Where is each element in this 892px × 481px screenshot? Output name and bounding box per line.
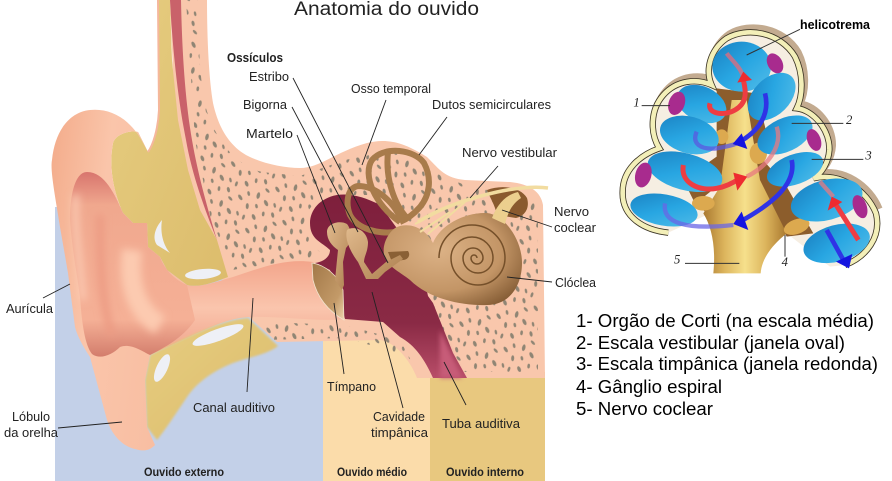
concha soft highlights bbox=[76, 195, 160, 335]
incus and stapes bbox=[346, 228, 403, 279]
cochlea bbox=[384, 213, 522, 305]
cochlear nerve bbox=[492, 192, 521, 224]
label: Aurícula: Aurícula bbox=[6, 301, 54, 316]
ear canal bbox=[150, 261, 345, 355]
temporal bone bbox=[170, 0, 545, 378]
lower bone speckles bbox=[262, 322, 415, 368]
labels: anatomy bbox=[4, 50, 597, 479]
lower cartilage bbox=[145, 318, 278, 440]
auricle bbox=[52, 110, 195, 450]
label: Estribo: Estribo bbox=[249, 69, 289, 84]
label: Ouvido externo: Ouvido externo bbox=[144, 465, 224, 479]
number callouts bbox=[642, 29, 863, 263]
label: Lóbulo da orelha bbox=[4, 409, 59, 440]
red arrowheads bbox=[733, 72, 842, 211]
label: Nervo coclear: Nervo bbox=[554, 204, 589, 219]
number 2: 2 bbox=[846, 113, 853, 127]
panel: ouvido externo background bbox=[55, 207, 323, 481]
label: Nervo vestibular: Nervo vestibular bbox=[462, 145, 558, 160]
nerve pocket bbox=[487, 187, 528, 218]
stapes footplate bbox=[388, 251, 409, 262]
legend item 1: 1- Orgão de Corti (na escala média) bbox=[576, 311, 874, 331]
pale flow tails bbox=[665, 53, 833, 227]
label: Bigorna: Bigorna bbox=[243, 97, 288, 112]
central bone bbox=[683, 88, 813, 237]
semicircular ducts bbox=[348, 151, 429, 232]
legend item 2: 2- Escala vestibular (janela oval) bbox=[576, 333, 845, 353]
malleus bbox=[327, 222, 351, 290]
upper cartilage bbox=[111, 0, 228, 286]
illustration: ear anatomy bbox=[52, 0, 548, 450]
label: Nervo coclear: coclear bbox=[554, 220, 597, 235]
legend item 3: 3- Escala timpânica (janela redonda) bbox=[576, 354, 878, 374]
label: Cavidade timpânica: Cavidade bbox=[373, 409, 425, 424]
label: Canal auditivo: Canal auditivo bbox=[193, 400, 275, 415]
label: Lóbulo da orelha: Lóbulo bbox=[12, 409, 50, 424]
number 1: 1 bbox=[633, 96, 640, 110]
label: Ouvido médio: Ouvido médio bbox=[337, 465, 407, 479]
scala chambers, blue bbox=[628, 42, 874, 270]
label: Lóbulo da orelha: da orelha bbox=[4, 425, 59, 440]
nerve branches bbox=[415, 202, 465, 234]
label: Cavidade timpânica bbox=[371, 409, 429, 440]
blue arrowheads bbox=[733, 133, 852, 268]
label: Osso temporal: Osso temporal bbox=[351, 81, 431, 96]
label: Clóclea: Clóclea bbox=[555, 275, 597, 290]
outer shell shadow bbox=[656, 28, 879, 209]
bone speckles bbox=[186, 0, 538, 372]
panel: ouvido medio background bbox=[323, 340, 430, 481]
capsule interior bbox=[623, 32, 877, 267]
blood vessel stripe bbox=[170, 0, 217, 240]
cartilage pink edge bbox=[148, 0, 159, 152]
number 5: 5 bbox=[674, 252, 680, 266]
label: Ossículos: Ossículos bbox=[227, 50, 283, 65]
number 3: 3 bbox=[864, 148, 872, 162]
legend item 5: 5- Nervo coclear bbox=[576, 399, 713, 419]
legend item 4: 4- Gânglio espiral bbox=[576, 377, 722, 397]
label: Ouvido interno: Ouvido interno bbox=[446, 465, 524, 479]
white cartilage highlights bbox=[151, 220, 245, 384]
tube highlight bbox=[440, 330, 462, 378]
number 4: 4 bbox=[782, 255, 789, 269]
label: Tímpano: Tímpano bbox=[327, 379, 376, 394]
vestibular nerve bbox=[418, 187, 548, 222]
label: Cavidade timpânica: timpânica bbox=[371, 425, 429, 440]
middle ear cavity and auditory tube bbox=[310, 194, 467, 378]
label: Nervo coclear bbox=[554, 204, 597, 235]
diagram: cochlea cross-section bbox=[623, 28, 879, 273]
capsule cream wall bbox=[623, 32, 877, 265]
label: Martelo: Martelo bbox=[246, 126, 293, 141]
blue arrows bbox=[740, 93, 843, 260]
nerve trunk bbox=[703, 100, 787, 273]
organ of Corti, purple bbox=[632, 50, 870, 220]
legend bbox=[576, 311, 878, 419]
leader lines bbox=[43, 78, 552, 428]
red arrows bbox=[683, 80, 858, 240]
concha bbox=[70, 172, 195, 357]
label: helicotrema: helicotrema bbox=[800, 17, 871, 32]
spiral ganglia bbox=[692, 129, 812, 238]
label: Tuba auditiva: Tuba auditiva bbox=[442, 416, 521, 431]
label: Dutos semicirculares: Dutos semicirculares bbox=[432, 97, 551, 112]
capsule dark outline bbox=[623, 32, 877, 265]
cochlear spiral bbox=[439, 225, 505, 285]
eardrum bbox=[312, 263, 344, 320]
panel: ouvido interno background bbox=[430, 372, 545, 481]
